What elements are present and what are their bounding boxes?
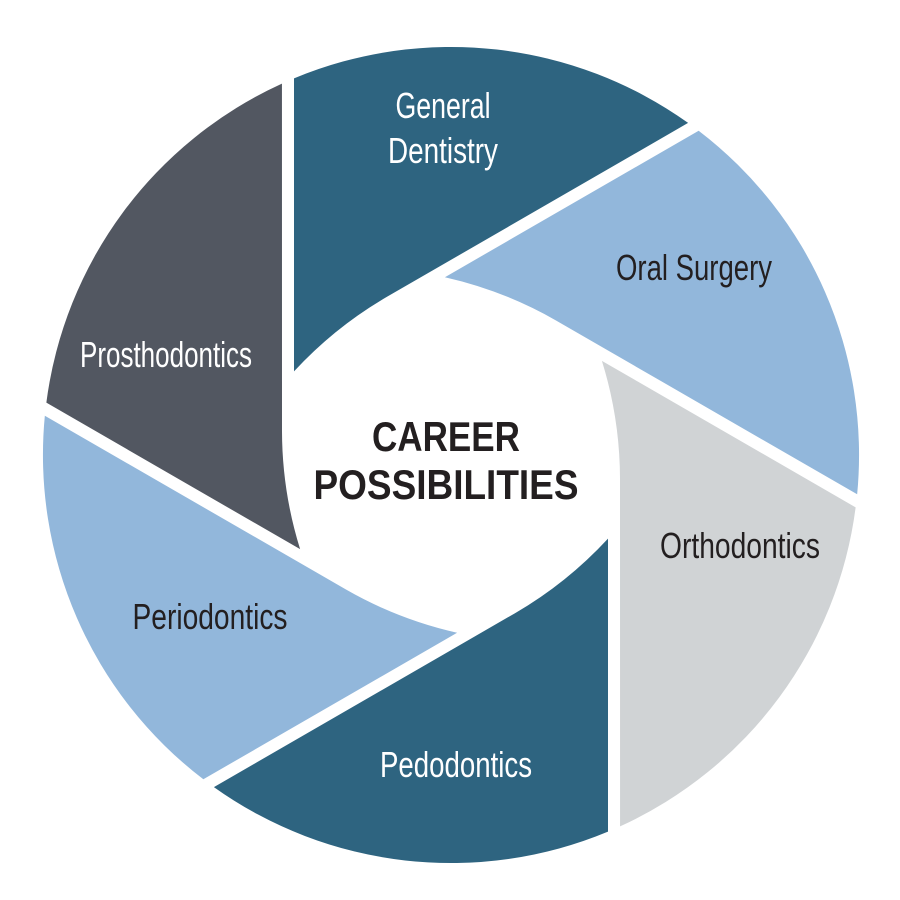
title: Career Possibilities: CAREER: [372, 413, 520, 460]
label: General Dentistry: [388, 85, 498, 171]
label: General Dentistry: General: [396, 85, 490, 126]
blade: Pedodontics: [214, 539, 608, 863]
blade: Periodontics: [0, 291, 457, 795]
label: Orthodontics: Orthodontics: [660, 525, 820, 566]
title: Career Possibilities: [314, 413, 578, 508]
blade: Prosthodontics: [19, 46, 497, 549]
title: Career Possibilities: POSSIBILITIES: [314, 461, 578, 508]
blade: Orthodontics: [405, 361, 883, 864]
blade: Oral Surgery: [445, 115, 900, 619]
label: Periodontics: Periodontics: [132, 596, 288, 637]
blade: General Dentistry: [294, 47, 688, 371]
label: General Dentistry: Dentistry: [388, 130, 498, 171]
label: Prosthodontics: Prosthodontics: [80, 334, 252, 375]
label: Pedodontics: Pedodontics: [380, 744, 532, 785]
label: Oral Surgery: Oral Surgery: [616, 247, 772, 288]
